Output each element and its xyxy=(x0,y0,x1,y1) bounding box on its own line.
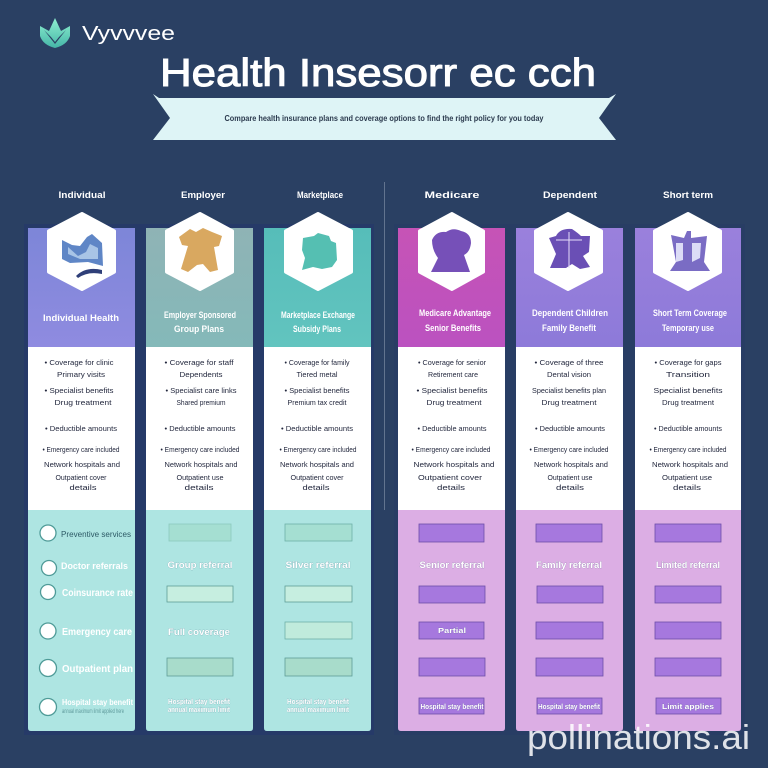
logo xyxy=(40,18,175,48)
row labels: annual maximum limit applied here xyxy=(62,709,124,715)
column 6 xyxy=(635,190,741,731)
details text: Dependents xyxy=(180,370,223,379)
details text: • Specialist benefits xyxy=(284,386,350,395)
details text xyxy=(160,358,240,492)
panel title: Employer Sponsored xyxy=(164,310,236,320)
details text: Network hospitals and xyxy=(652,460,728,469)
details text: • Deductible amounts xyxy=(418,424,487,433)
details text: details xyxy=(556,483,584,492)
details text: Outpatient use xyxy=(548,473,592,482)
details text: Network hospitals and xyxy=(534,460,608,469)
details text: • Deductible amounts xyxy=(164,424,236,433)
comparison rows: Full coverage xyxy=(168,627,230,638)
comparison rows xyxy=(285,524,352,714)
details text: details xyxy=(184,483,214,492)
header panel xyxy=(635,228,741,347)
panel title: Senior Benefits xyxy=(425,323,481,333)
comparison rows: Group referral xyxy=(168,560,232,571)
details text: • Specialist benefits xyxy=(44,386,114,395)
column heading: Employer xyxy=(181,190,226,200)
column heading: Marketplace xyxy=(297,190,343,200)
title: Health Insesorr ec cch xyxy=(160,52,596,95)
details text: details xyxy=(70,483,97,492)
lower panel xyxy=(264,510,371,731)
icon: shield logo xyxy=(40,18,70,48)
comparison rows: Limit applies xyxy=(662,704,714,711)
icon: teal shape xyxy=(302,233,337,270)
details panel xyxy=(398,347,505,510)
column 3 xyxy=(264,190,371,731)
hexagon badge xyxy=(48,214,114,290)
details text: • Emergency care included xyxy=(412,445,490,454)
header panel xyxy=(398,228,505,347)
details text: Drug treatment xyxy=(662,398,715,407)
details text: Network hospitals and xyxy=(164,460,238,469)
panel title: Subsidy Plans xyxy=(293,324,341,334)
details text: Outpatient use xyxy=(662,473,712,482)
details text: • Emergency care included xyxy=(160,445,240,454)
comparison rows: Hospital stay benefit xyxy=(168,699,231,706)
column 5 xyxy=(516,190,623,731)
details text: • Deductible amounts xyxy=(281,424,353,433)
details panel xyxy=(146,347,253,510)
details text: • Emergency care included xyxy=(280,445,356,454)
details text: Drug treatment xyxy=(426,398,482,407)
details text: • Emergency care included xyxy=(42,445,120,454)
panel title: Medicare Advantage xyxy=(419,308,491,318)
details text: Transition xyxy=(666,370,710,379)
details panel xyxy=(516,347,623,510)
details text: Dental vision xyxy=(547,370,591,379)
panel title: Individual Health xyxy=(43,313,119,323)
icon: purple figure xyxy=(431,229,471,272)
lower panel xyxy=(516,510,623,731)
details text: Primary visits xyxy=(57,370,105,379)
row labels xyxy=(61,530,133,715)
details text: • Emergency care included xyxy=(530,445,608,454)
panel title: Temporary use xyxy=(662,323,714,333)
comparison rows: Silver referral xyxy=(286,560,350,571)
icon: orange figure xyxy=(179,228,222,272)
icon: open book with cross xyxy=(670,231,710,271)
comparison rows: Family referral xyxy=(536,560,602,571)
hexagon badge xyxy=(420,214,484,290)
details text xyxy=(280,358,356,492)
row labels: Coinsurance rate xyxy=(62,588,133,599)
comparison rows: Senior referral xyxy=(420,560,484,571)
comparison rows: Hospital stay benefit xyxy=(287,699,350,706)
row labels: Doctor referrals xyxy=(61,561,128,571)
details text: details xyxy=(302,483,330,492)
comparison rows: annual maximum limit xyxy=(287,707,350,714)
header panel xyxy=(264,228,371,347)
details text: details xyxy=(437,483,465,492)
panel title: Family Benefit xyxy=(542,323,596,333)
details text: • Coverage for gaps xyxy=(654,358,722,367)
header panel xyxy=(516,228,623,347)
details text: Outpatient use xyxy=(176,473,224,482)
details text: • Coverage for staff xyxy=(164,358,234,367)
details text: Tiered metal xyxy=(296,370,338,379)
row markers xyxy=(40,525,56,716)
details text: Outpatient cover xyxy=(56,473,107,482)
details text: Network hospitals and xyxy=(414,460,494,469)
column heading: Short term xyxy=(663,190,713,200)
details text xyxy=(412,358,494,492)
details text: Premium tax credit xyxy=(288,398,347,407)
comparison rows xyxy=(167,524,233,714)
details text: • Deductible amounts xyxy=(45,424,117,433)
lower panel xyxy=(635,510,741,731)
details text: Specialist benefits plan xyxy=(532,386,606,395)
ribbon shape xyxy=(153,94,616,140)
comparison rows: Partial xyxy=(438,628,466,635)
panel title: Group Plans xyxy=(174,324,224,334)
panel title xyxy=(164,310,236,334)
header panel xyxy=(28,228,135,347)
details text xyxy=(42,358,120,492)
panel title xyxy=(653,308,727,333)
lower panel xyxy=(146,510,253,731)
column 4 xyxy=(398,190,505,731)
details text: • Coverage for clinic xyxy=(44,358,114,367)
logo mark cut xyxy=(44,30,66,44)
center divider xyxy=(384,182,385,510)
comparison rows: annual maximum limit xyxy=(168,707,231,714)
details text: • Deductible amounts xyxy=(535,424,605,433)
details text: • Coverage for family xyxy=(284,358,350,367)
comparison rows: Hospital stay benefit xyxy=(420,704,484,711)
panel title: Dependent Children xyxy=(532,308,608,318)
details text: Specialist benefits xyxy=(654,386,723,395)
details text: Drug treatment xyxy=(542,398,597,407)
column heading: Dependent xyxy=(543,190,597,200)
logo wordmark: Vyvvvee xyxy=(82,23,175,45)
icon: medical cross figure xyxy=(549,229,590,269)
watermark: pollinations.ai xyxy=(527,719,750,757)
header panel xyxy=(146,228,253,347)
panel title xyxy=(281,310,355,334)
column 2 xyxy=(146,190,253,731)
details panel xyxy=(635,347,741,510)
icon: open book xyxy=(62,234,103,278)
comparison rows xyxy=(655,524,721,714)
panel title: Marketplace Exchange xyxy=(281,310,355,320)
details text: • Coverage for senior xyxy=(418,358,486,367)
details text xyxy=(650,358,728,492)
row labels: Hospital stay benefit xyxy=(62,698,133,707)
hexagon badge xyxy=(166,214,232,290)
lower panel xyxy=(28,510,135,731)
details text: Outpatient cover xyxy=(290,473,344,482)
row labels: Outpatient plan xyxy=(62,664,133,675)
row labels: Preventive services xyxy=(61,530,131,539)
details text: Drug treatment xyxy=(54,398,113,407)
details text: Outpatient cover xyxy=(418,473,483,482)
column 1 xyxy=(28,190,135,731)
hexagon badge xyxy=(286,214,352,290)
details text: • Specialist benefits xyxy=(416,386,488,395)
comparison rows: Hospital stay benefit xyxy=(538,704,601,711)
details text: Network hospitals and xyxy=(44,460,120,469)
comparison rows xyxy=(419,524,485,714)
lower panel xyxy=(398,510,505,731)
column heading: Medicare xyxy=(424,190,480,200)
details text: • Coverage of three xyxy=(534,358,604,367)
details text: • Deductible amounts xyxy=(654,424,722,433)
details text: Shared premium xyxy=(176,398,226,407)
column heading: Individual xyxy=(58,190,106,200)
row labels: Emergency care xyxy=(62,627,132,638)
hexagon badge xyxy=(654,214,720,290)
hexagon badge xyxy=(536,214,602,290)
panel title xyxy=(532,308,608,333)
ribbon banner xyxy=(153,94,616,140)
details text: Network hospitals and xyxy=(280,460,354,469)
details text: • Specialist care links xyxy=(166,386,237,395)
panel title xyxy=(419,308,491,333)
details text xyxy=(530,358,608,492)
ribbon subtitle: Compare health insurance plans and coverage options to find the right policy for you today xyxy=(224,114,544,123)
comparison rows: Limited referral xyxy=(656,560,720,571)
panel title: Short Term Coverage xyxy=(653,308,727,318)
details text: • Emergency care included xyxy=(650,445,726,454)
details panel xyxy=(28,347,135,510)
comparison rows xyxy=(536,524,603,714)
details text: Retirement care xyxy=(428,370,478,379)
details text: details xyxy=(673,483,701,492)
details panel xyxy=(264,347,371,510)
